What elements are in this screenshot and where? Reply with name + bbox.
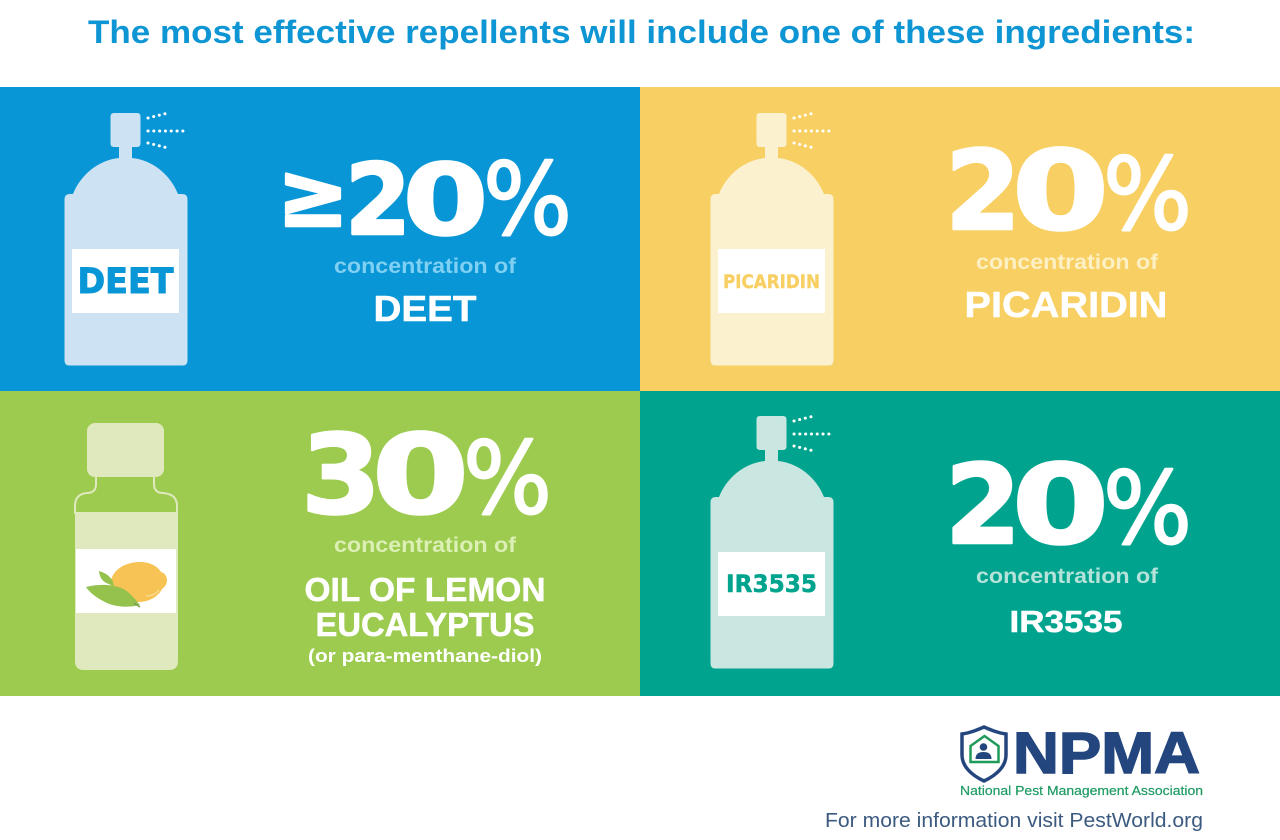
full name: National Pest Management Association	[960, 784, 1203, 798]
big number: %	[1103, 450, 1192, 567]
ingredient name: PICARIDIN	[964, 284, 1168, 325]
big number: 0	[372, 411, 469, 539]
icon: IR3535 spray can: IR3535	[726, 570, 817, 598]
ingredient name: OIL OF LEMON	[304, 571, 546, 608]
panel: oil of lemon eucalyptus	[0, 391, 640, 696]
ingredient name: EUCALYPTUS	[316, 606, 534, 643]
ingredient name	[304, 571, 546, 666]
ingredient name: DEET	[374, 288, 477, 329]
big number	[945, 127, 1192, 255]
big number: %	[483, 141, 572, 258]
panel: PICARIDIN	[640, 87, 1280, 391]
title: The most effective repellents will include one of these ingredients:	[88, 14, 1195, 50]
big number: 2	[945, 441, 1021, 569]
icon: shield	[962, 727, 1006, 781]
icon: PICARIDIN spray can: PICARIDIN	[723, 271, 820, 293]
concentration label: concentration of	[334, 534, 517, 557]
NPMA logo	[960, 721, 1203, 798]
icon: DEET spray can	[64, 113, 188, 366]
big number: ≥	[277, 143, 349, 248]
big number: %	[1103, 136, 1192, 253]
panel: DEET	[0, 87, 640, 391]
big number: 0	[1012, 127, 1109, 255]
icon: lemon	[86, 562, 167, 607]
icon: IR3535 spray can	[710, 416, 834, 668]
icon: PICARIDIN spray can	[710, 113, 834, 366]
big number: 0	[403, 144, 488, 258]
concentration label: concentration of	[976, 565, 1159, 588]
icon: lemon eucalyptus bottle	[75, 423, 178, 670]
big number: 2	[945, 127, 1021, 255]
big number	[277, 141, 572, 258]
icon: DEET spray can: DEET	[78, 262, 174, 302]
concentration label: concentration of	[334, 255, 517, 278]
concentration label: concentration of	[976, 251, 1159, 274]
big number: 0	[1012, 441, 1109, 569]
big number	[945, 441, 1192, 569]
wordmark: NPMA	[1013, 721, 1200, 786]
big number: %	[463, 420, 552, 537]
ingredient name: (or para-menthane-diol)	[308, 646, 542, 666]
big number	[301, 411, 552, 539]
big number: 2	[345, 144, 411, 258]
footer link text: For more information visit PestWorld.org	[825, 810, 1203, 832]
panel: IR3535	[640, 391, 1280, 696]
ingredient name: IR3535	[1010, 604, 1122, 639]
big number: 3	[301, 411, 381, 539]
